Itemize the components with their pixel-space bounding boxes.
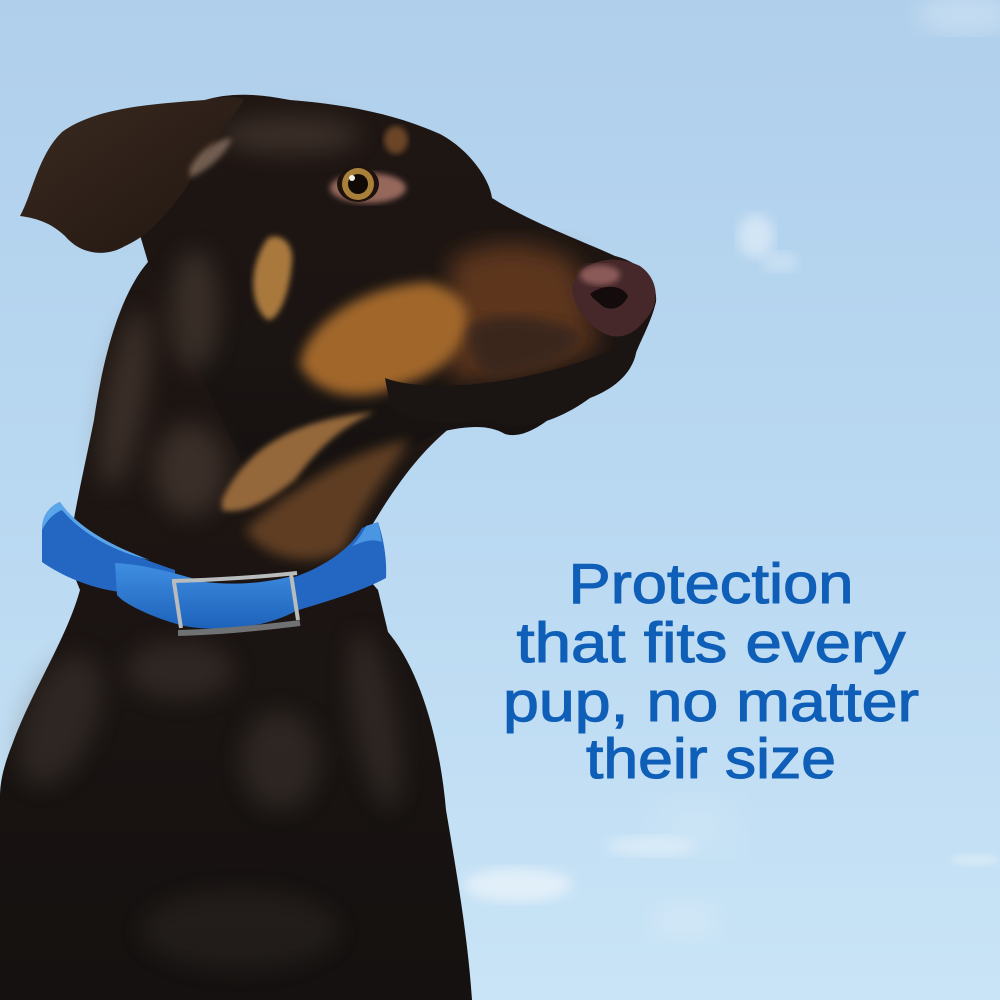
- collar right lip: [352, 522, 382, 546]
- tan chest neck marking: [222, 412, 375, 511]
- metal buckle: [172, 573, 300, 633]
- dark muzzle detail: [468, 317, 580, 376]
- collar right band: [285, 522, 386, 612]
- tan throat marking: [245, 440, 410, 560]
- tan muzzle marking: [300, 282, 468, 395]
- ear inner highlight: [190, 138, 232, 178]
- collar: [42, 502, 386, 633]
- collar left band: [42, 502, 175, 600]
- collar overlap tab: [115, 563, 294, 629]
- headline text: their size: [586, 727, 836, 791]
- neck sheen: [90, 117, 360, 516]
- headline text: that fits every: [516, 611, 906, 675]
- dog body and neck: [0, 220, 472, 1000]
- clouds: [464, 0, 1000, 940]
- dog photo illustration: [0, 95, 656, 1000]
- headline text: Protection: [568, 552, 854, 616]
- rusty muzzle top: [450, 244, 600, 380]
- eye: [330, 166, 406, 203]
- mouth and jaw: [385, 340, 637, 426]
- headline text: pup, no matter: [503, 670, 919, 734]
- headline text: [503, 552, 919, 791]
- collar left lip: [42, 502, 150, 560]
- eyebrow marking: [384, 126, 408, 154]
- dog head: [140, 95, 656, 520]
- dog ear: [20, 97, 244, 253]
- coat highlights: [0, 628, 412, 970]
- tan cheek stripe: [253, 237, 292, 320]
- nose: [572, 260, 656, 336]
